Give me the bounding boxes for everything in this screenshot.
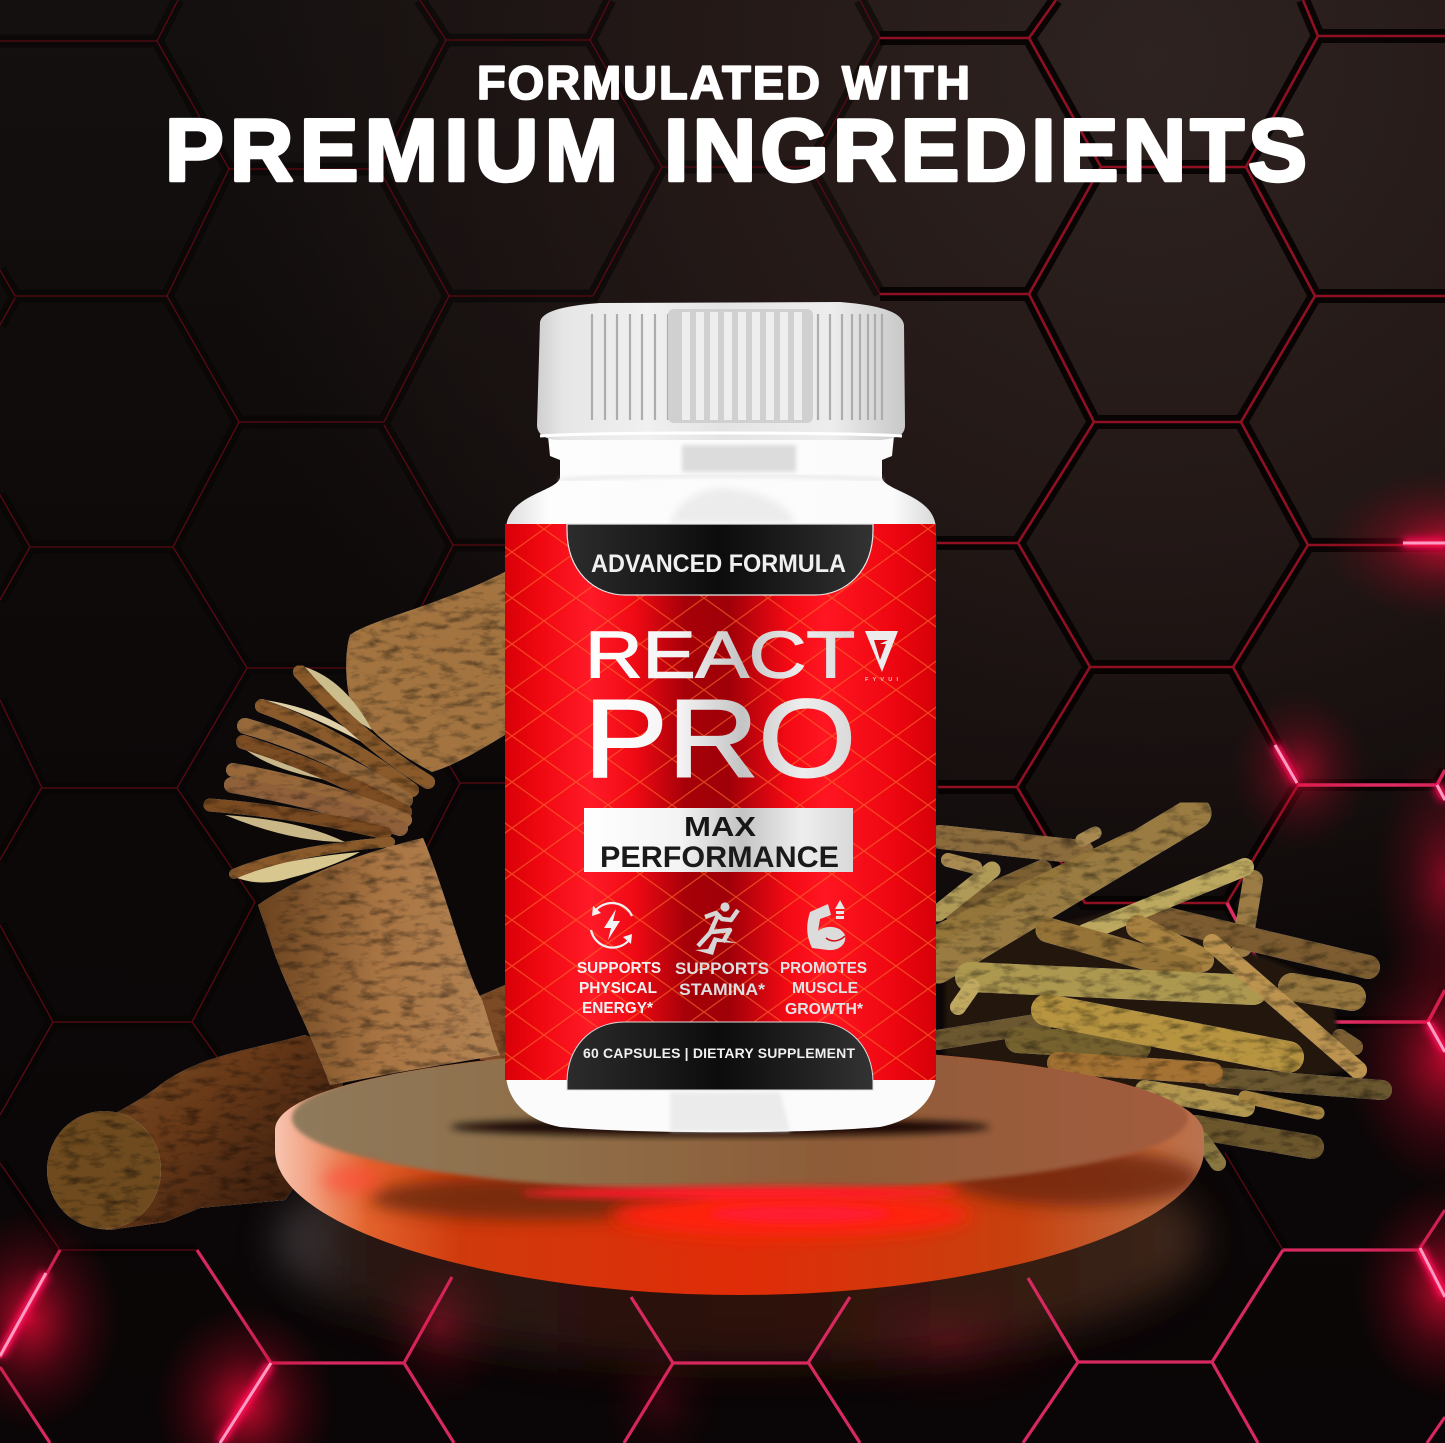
heading line 1: WITH xyxy=(842,56,970,109)
platform side xyxy=(275,1047,1204,1295)
max performance box: MAX xyxy=(684,811,756,842)
bottle cap xyxy=(537,302,905,440)
cut end of lower root xyxy=(47,1111,161,1229)
upper root xyxy=(346,572,505,772)
bottle base xyxy=(506,1076,936,1132)
product name: REACT xyxy=(585,618,855,692)
shoulder shading xyxy=(670,488,795,524)
top badge xyxy=(567,524,873,595)
benefit: stamina: STAMINA* xyxy=(679,980,765,999)
cassava root left xyxy=(47,572,505,1230)
hot red highlight xyxy=(610,1193,970,1237)
icon: muscle xyxy=(807,900,845,950)
ashwagandha roots pile xyxy=(937,813,1382,1163)
heading line 1: FORMULATED xyxy=(477,56,820,109)
neck band xyxy=(560,476,882,480)
benefit: muscle growth: MUSCLE xyxy=(792,980,858,997)
top badge: ADVANCED FORMULA xyxy=(591,550,846,578)
pile shadow xyxy=(945,905,1345,1105)
logo xyxy=(865,631,898,683)
product name: PRO xyxy=(584,678,856,800)
benefit: stamina xyxy=(675,959,769,999)
bottle neck and shoulder xyxy=(506,436,936,530)
logo: FYVUI xyxy=(865,677,898,683)
neck shading xyxy=(682,445,796,472)
bottle shadow xyxy=(450,1118,990,1136)
benefit: muscle growth xyxy=(780,960,867,1018)
max performance box xyxy=(584,808,853,874)
benefit: stamina: SUPPORTS xyxy=(675,959,769,978)
heading line 2: PREMIUM xyxy=(165,100,618,200)
benefit: physical energy: ENERGY* xyxy=(582,1000,654,1017)
pile sticks xyxy=(937,813,1382,1163)
platform top surface xyxy=(292,1045,1188,1191)
upright stump xyxy=(258,838,500,1085)
platform xyxy=(275,1045,1204,1295)
neon glow xyxy=(0,470,1445,1443)
bottom badge xyxy=(567,1022,873,1090)
icon: energy cycle xyxy=(591,903,632,948)
root slices xyxy=(210,667,428,883)
bottle xyxy=(505,302,936,1132)
icon: runner xyxy=(695,902,738,955)
platform reflection xyxy=(278,1115,1202,1365)
benefit: physical energy: SUPPORTS xyxy=(577,960,661,977)
benefit: muscle growth: GROWTH* xyxy=(785,1001,864,1018)
benefit: muscle growth: PROMOTES xyxy=(780,960,867,977)
label xyxy=(505,524,936,1090)
bottom badge: 60 CAPSULES | DIETARY SUPPLEMENT xyxy=(583,1045,855,1061)
max performance box: PERFORMANCE xyxy=(600,841,839,874)
title xyxy=(165,56,1307,200)
back root behind stump xyxy=(470,985,505,1060)
benefit: physical energy: PHYSICAL xyxy=(579,980,657,997)
product name xyxy=(584,618,856,800)
lower root xyxy=(48,1035,345,1230)
heading line 2: INGREDIENTS xyxy=(664,100,1307,200)
benefit: physical energy xyxy=(577,960,661,1017)
